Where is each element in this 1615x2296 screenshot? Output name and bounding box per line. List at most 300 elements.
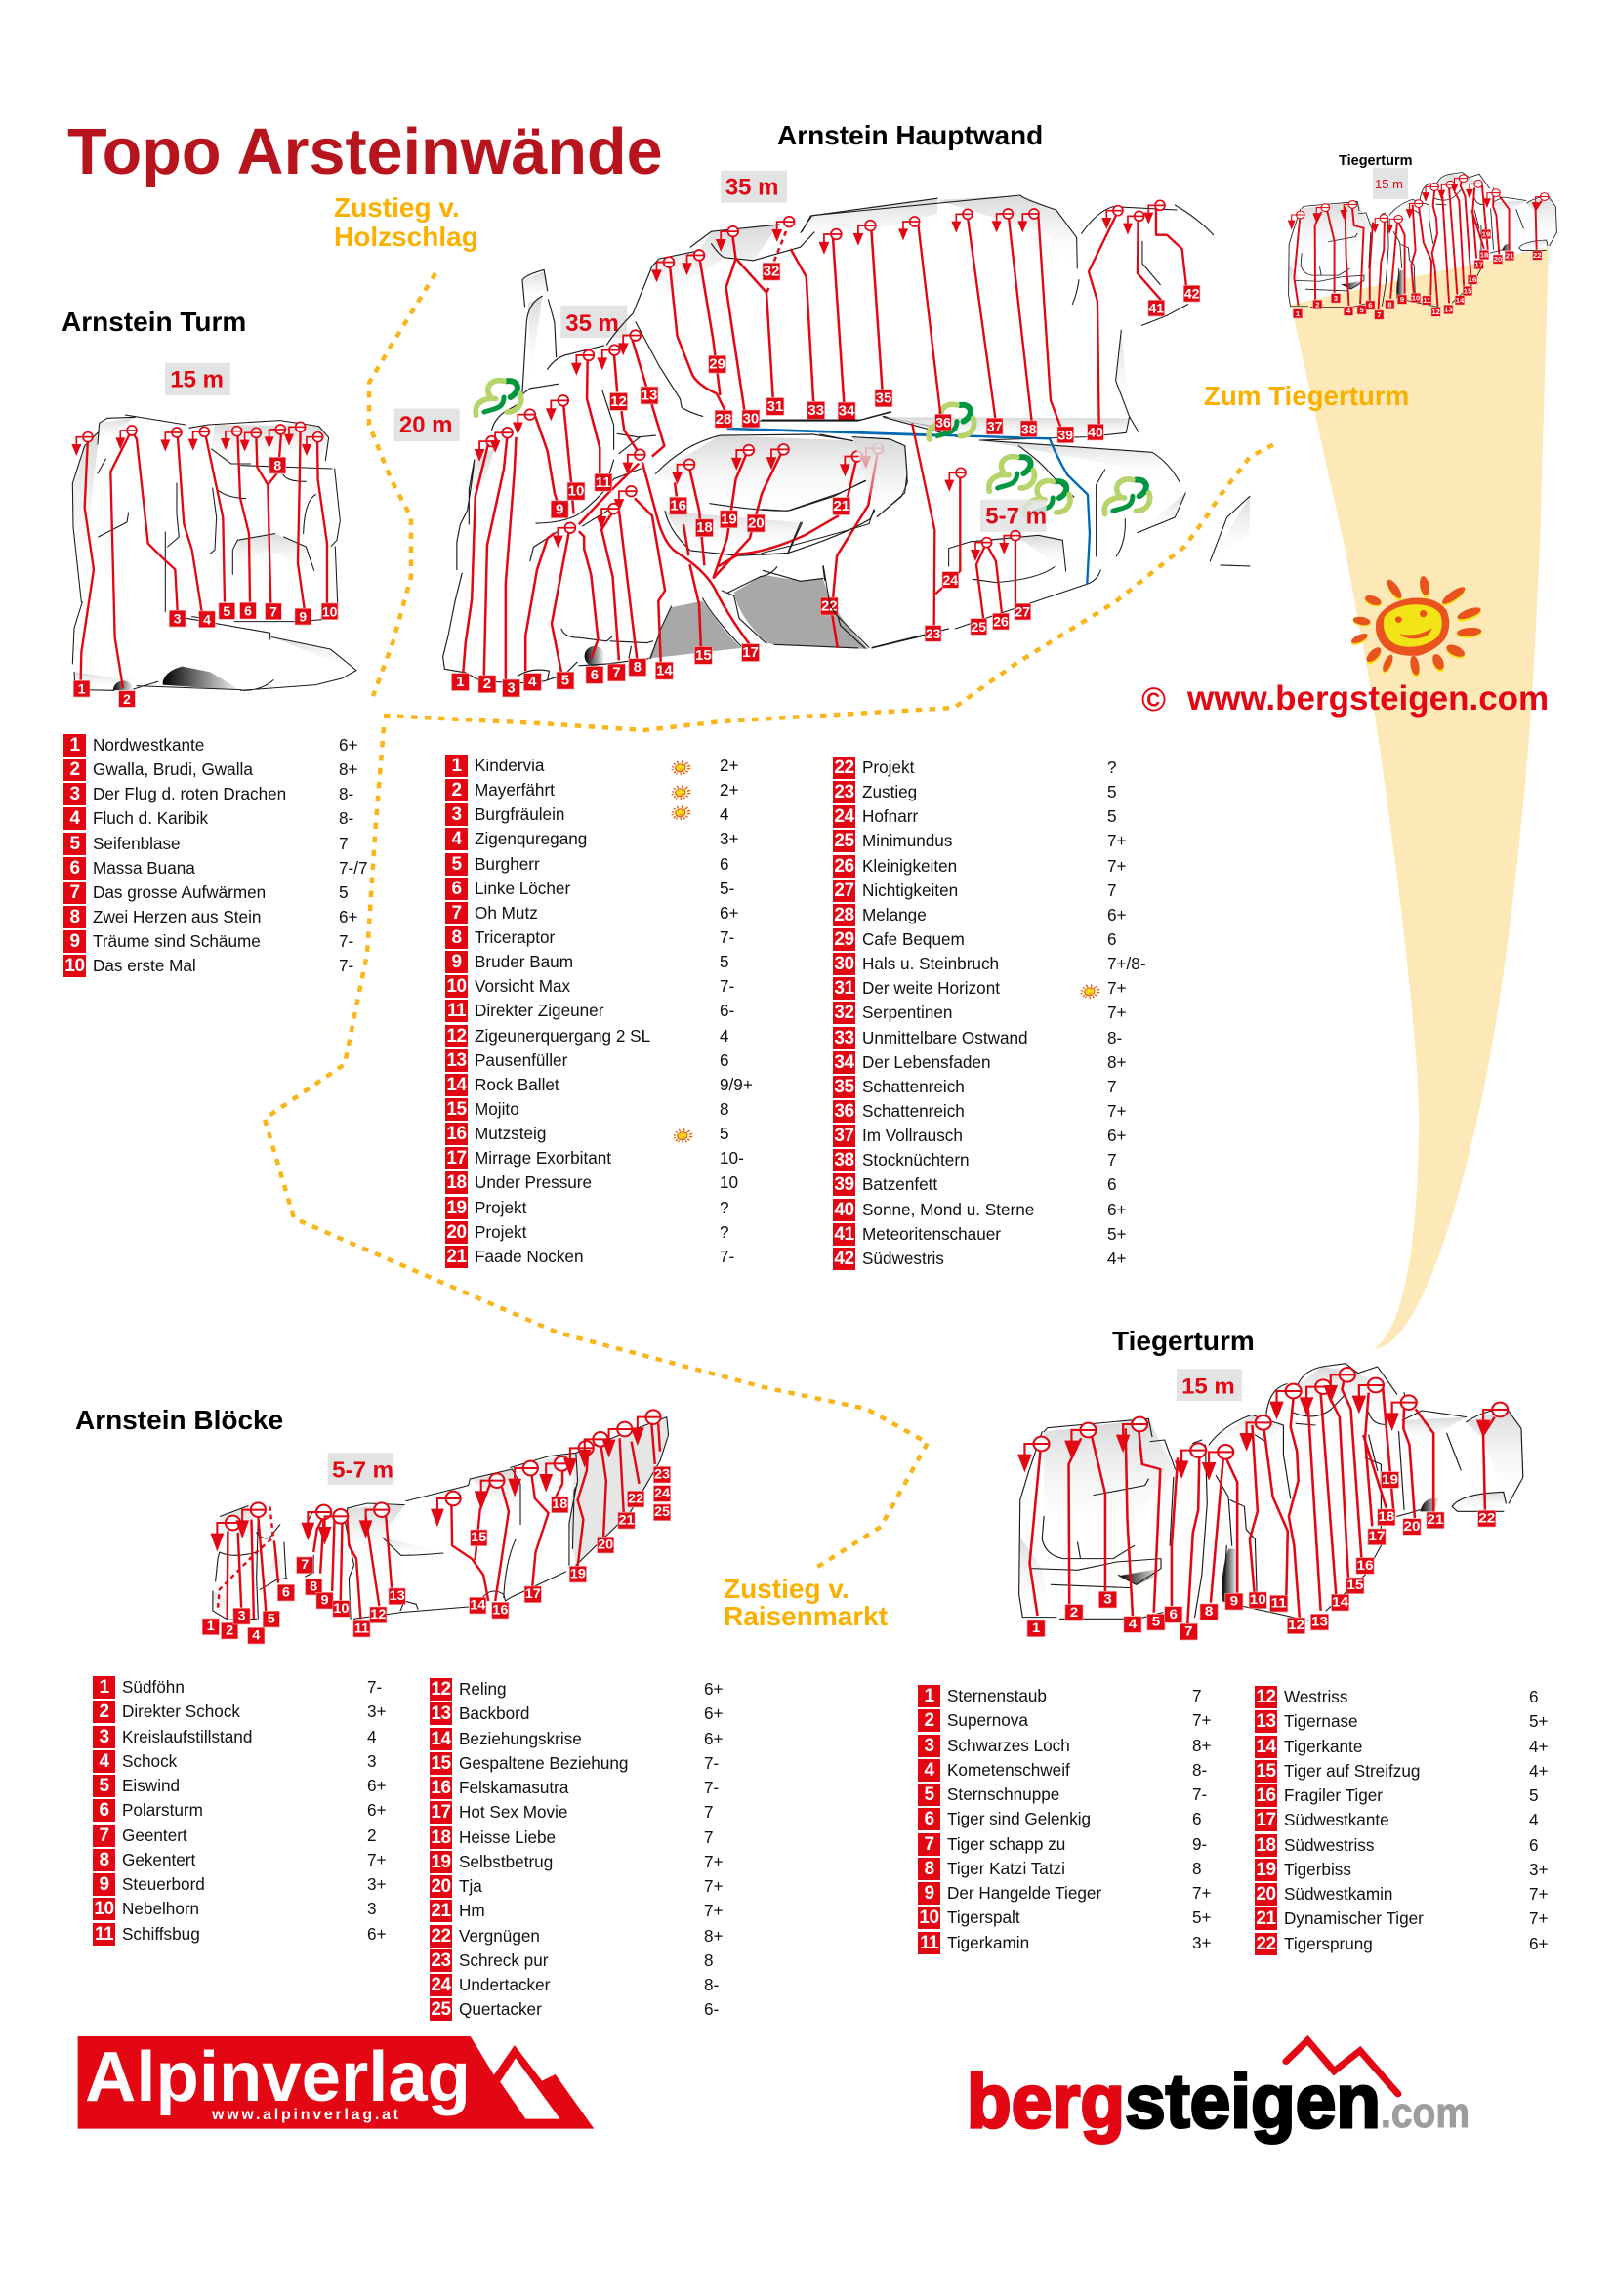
- small route number badges: 2: [1315, 300, 1319, 308]
- approach label: Zustieg v. Raisenmarkt: Raisenmarkt: [724, 1601, 888, 1631]
- text: Südwestkante: [1284, 1810, 1389, 1829]
- text: 1: [924, 1686, 934, 1706]
- small route number badges: 21: [1506, 251, 1514, 260]
- text: 6: [1107, 1174, 1117, 1194]
- text: 5: [451, 854, 462, 875]
- text: Rock Ballet: [475, 1075, 559, 1094]
- text: 16: [431, 1778, 451, 1798]
- text: Polarsturm: [122, 1800, 203, 1820]
- text: 8-: [339, 784, 353, 803]
- text: 6: [1529, 1835, 1539, 1855]
- text: Nichtigkeiten: [862, 881, 958, 900]
- text: 20: [431, 1876, 451, 1897]
- approach label: Zustieg v. Holzschlag: Holzschlag: [334, 222, 478, 252]
- small route number badges: 22: [1533, 251, 1542, 260]
- text: 2: [99, 1702, 109, 1722]
- text: Hot Sex Movie: [459, 1802, 567, 1822]
- route number badges: 24: [943, 572, 958, 588]
- text: 1: [69, 735, 80, 756]
- text: 38: [834, 1150, 854, 1170]
- route number badges: 6: [282, 1585, 290, 1601]
- text: 6-: [704, 1999, 719, 2019]
- text: 5: [1107, 806, 1117, 826]
- route number badges: 3: [174, 611, 182, 627]
- text: Undertacker: [459, 1975, 550, 1994]
- text: 7+: [1192, 1883, 1212, 1903]
- text: 33: [834, 1028, 854, 1048]
- route number badges: 31: [767, 398, 783, 415]
- text: Zigenquregang: [475, 829, 587, 848]
- text: 8: [99, 1850, 109, 1870]
- route number badges: 27: [1015, 604, 1030, 620]
- route number badges: 3: [237, 1609, 246, 1624]
- text: 4: [924, 1760, 934, 1781]
- text: 7+: [1529, 1908, 1549, 1928]
- text: 7: [924, 1833, 934, 1855]
- text: 5+: [1529, 1711, 1549, 1731]
- text: ?: [720, 1198, 729, 1217]
- approach label: Zustieg v. Raisenmarkt: Zustieg v.: [724, 1574, 849, 1604]
- text: 9-: [1192, 1833, 1207, 1853]
- small route number badges: 8: [1387, 300, 1392, 308]
- route number badges: 18: [552, 1496, 567, 1512]
- text: 6+: [704, 1703, 724, 1723]
- text: Eiswind: [122, 1776, 180, 1795]
- text: 11: [447, 1001, 466, 1021]
- text: 8+: [704, 1925, 724, 1945]
- route number badges: 11: [596, 474, 611, 491]
- text: 14: [431, 1728, 451, 1749]
- text: Vergnügen: [459, 1925, 540, 1945]
- text: Schwarzes Loch: [947, 1736, 1070, 1755]
- heading: Arnstein Hauptwand: Arnstein Hauptwand: [777, 120, 1043, 150]
- text: 7: [704, 1802, 714, 1822]
- rock shading: [213, 1417, 669, 1620]
- text: Mojito: [475, 1099, 519, 1119]
- route number badges: 22: [628, 1492, 643, 1507]
- small route number badges: 20: [1494, 255, 1502, 264]
- route number badges: [451, 263, 892, 697]
- text: 9: [99, 1874, 109, 1895]
- text: 32: [834, 1003, 854, 1023]
- text: 7: [99, 1825, 109, 1845]
- icon: trees at left of Hauptwand: [476, 381, 521, 415]
- text: 31: [834, 978, 854, 999]
- text: 5: [99, 1776, 109, 1796]
- text: 8-: [1192, 1760, 1207, 1780]
- text: Tiger schapp zu: [947, 1833, 1065, 1853]
- text: 3: [99, 1726, 109, 1747]
- text: 4: [720, 804, 729, 824]
- dotted path: to Raisenmarkt: [265, 727, 928, 1571]
- route number badges: 12: [370, 1607, 386, 1622]
- text: Projekt: [862, 758, 914, 777]
- text: 2: [69, 759, 80, 780]
- height tag: 35 m left: [560, 306, 627, 338]
- text: 23: [431, 1950, 451, 1971]
- text: 8: [924, 1859, 934, 1879]
- text: 7-: [704, 1753, 719, 1773]
- route number badges: 10: [1250, 1593, 1266, 1608]
- text: 7: [339, 834, 349, 853]
- approach label: Zum Tiegerturm: Zum Tiegerturm: [1204, 381, 1409, 411]
- anchors and abseil arrows: [210, 1410, 661, 1551]
- route number badges: 28: [716, 411, 731, 428]
- sun illustration: [1350, 575, 1482, 678]
- route number badges: 30: [743, 410, 759, 427]
- text: 24: [431, 1975, 451, 1995]
- text: 3+: [367, 1874, 387, 1894]
- text: 10: [94, 1899, 114, 1919]
- text: 7: [1192, 1686, 1202, 1705]
- height tag: 15 m: [1177, 1369, 1242, 1401]
- rock shading: [852, 195, 1250, 571]
- text: 28: [834, 905, 854, 925]
- small route number badges: 18: [1480, 250, 1489, 259]
- route list: Tiegerturm routes 1 to 11: [918, 1685, 1212, 1954]
- text: 7+: [1107, 856, 1127, 876]
- text: 5: [924, 1784, 934, 1805]
- text: Sternschnuppe: [947, 1784, 1059, 1804]
- route number badges: 13: [642, 387, 657, 403]
- logo: bergsteigen.com: bergsteigen: [967, 2058, 1381, 2144]
- text: 26: [834, 856, 854, 877]
- route number badges: 1: [78, 681, 86, 697]
- route list: Hauptwand routes 1 to 21: [445, 755, 753, 1268]
- text: 6+: [367, 1923, 387, 1943]
- text: Massa Buana: [93, 858, 195, 878]
- heading: Tiegerturm: Tiegerturm: [1112, 1326, 1255, 1356]
- text: Gespaltene Beziehung: [459, 1753, 628, 1773]
- text: 15: [1256, 1761, 1276, 1782]
- text: 4: [1529, 1810, 1539, 1829]
- text: Mutzsteig: [475, 1124, 546, 1143]
- small route number badges: 15: [1464, 286, 1472, 295]
- text: Supernova: [947, 1710, 1028, 1730]
- route number badges: 19: [1382, 1472, 1398, 1488]
- rock outline: [443, 198, 937, 683]
- route number badges: 15: [471, 1530, 486, 1545]
- text: 19: [431, 1852, 451, 1872]
- text: 12: [1256, 1687, 1276, 1707]
- route number badges: 22: [821, 598, 838, 615]
- route number badges: 15: [695, 647, 712, 664]
- text: Schattenreich: [862, 1101, 965, 1121]
- anchors and abseil arrows: [898, 200, 1165, 561]
- route number badges: 6: [1170, 1607, 1178, 1622]
- text: Hals u. Steinbruch: [862, 954, 999, 973]
- route number badges: 36: [935, 415, 951, 430]
- text: 8+: [1192, 1736, 1212, 1755]
- height tag: 15 m: [165, 363, 230, 395]
- route number badges: 33: [808, 402, 824, 419]
- text: 6+: [339, 907, 358, 926]
- text: 4+: [1529, 1761, 1549, 1781]
- text: 6+: [1107, 905, 1127, 924]
- anchors and abseil arrows: [475, 217, 884, 548]
- text: Mirrage Exorbitant: [475, 1148, 611, 1168]
- text: 17: [431, 1802, 451, 1823]
- route number badges: 14: [656, 663, 673, 679]
- route number badges: 10: [568, 483, 584, 500]
- text: Tja: [459, 1876, 482, 1896]
- small route number badges: 19: [1482, 229, 1490, 238]
- text: Bruder Baum: [475, 952, 573, 971]
- text: 3+: [1529, 1860, 1549, 1879]
- anchors and abseil arrows: [1017, 1368, 1508, 1481]
- route number badges: [1027, 1472, 1496, 1640]
- text: Burgfräulein: [475, 804, 564, 824]
- climbing routes: [81, 427, 327, 688]
- text: 22: [834, 758, 854, 778]
- route number badges: 22: [1478, 1511, 1495, 1526]
- route number badges: 17: [1369, 1530, 1386, 1544]
- text: 14: [446, 1075, 467, 1095]
- height tag: 15 m: 15 m: [1181, 1374, 1235, 1398]
- text: Sonne, Mond u. Sterne: [862, 1200, 1034, 1219]
- route number badges: [202, 1466, 671, 1644]
- text: 5: [1107, 782, 1117, 801]
- text: 7+: [704, 1852, 724, 1871]
- text: Dynamischer Tiger: [1284, 1908, 1424, 1928]
- text: ?: [1107, 758, 1117, 777]
- text: 4+: [1107, 1249, 1127, 1268]
- text: 9: [451, 952, 462, 972]
- icons: small suns marking family routes: [671, 760, 1100, 1144]
- text: Tiger sind Gelenkig: [947, 1809, 1091, 1828]
- text: 30: [834, 954, 854, 974]
- text: Vorsicht Max: [475, 976, 570, 996]
- text: 8+: [339, 759, 358, 779]
- height tag: 35 m upper: [721, 171, 787, 202]
- route number badges: 2: [483, 676, 491, 692]
- route number badges: 42: [1184, 286, 1200, 302]
- text: Träume sind Schäume: [93, 931, 261, 951]
- route number badges: 38: [1021, 421, 1037, 436]
- text: 42: [834, 1249, 854, 1269]
- text: Zwei Herzen aus Stein: [93, 907, 261, 926]
- route number badges: 7: [301, 1557, 309, 1573]
- text: 4+: [1529, 1736, 1549, 1755]
- text: 13: [1256, 1711, 1276, 1732]
- dotted path: Holzschlag approach: [369, 273, 435, 696]
- heading: small Tiegerturm: Tiegerturm: [1339, 153, 1412, 169]
- text: 4: [69, 808, 80, 829]
- route number badges: 21: [618, 1513, 635, 1529]
- route number badges: 1: [456, 674, 465, 690]
- route number badges: 19: [721, 511, 737, 527]
- text: Kleinigkeiten: [862, 856, 957, 876]
- panel: Arnstein Hauptwand topo, right part: [762, 195, 1250, 647]
- text: Der Lebensfaden: [862, 1052, 991, 1072]
- text: Tigernase: [1284, 1711, 1358, 1731]
- text: 10: [446, 976, 467, 997]
- dotted path: to Tiegerturm: [384, 444, 1274, 730]
- text: Selbstbetrug: [459, 1852, 553, 1871]
- text: 6: [720, 1050, 729, 1070]
- route number badges: 23: [926, 626, 941, 641]
- text: 39: [834, 1174, 854, 1195]
- text: 40: [834, 1200, 854, 1220]
- climbing routes: [463, 225, 883, 681]
- text: Projekt: [475, 1198, 526, 1217]
- text: Schreck pur: [459, 1950, 548, 1970]
- route list: Blöcke routes 12 to 25: [430, 1678, 724, 2021]
- text: 7-: [367, 1677, 382, 1697]
- text: 7+: [704, 1876, 724, 1896]
- rock shading: [469, 198, 937, 666]
- text: 2+: [720, 780, 739, 800]
- text: Projekt: [475, 1222, 526, 1242]
- text: 7: [704, 1827, 714, 1847]
- small route number badges: 11: [1423, 296, 1431, 305]
- text: 5+: [1107, 1224, 1127, 1244]
- text: Minimundus: [862, 831, 952, 850]
- text: 6+: [704, 1679, 724, 1699]
- text: 3: [69, 784, 80, 804]
- text: 4: [451, 829, 462, 849]
- text: 3+: [1192, 1933, 1212, 1952]
- route number badges: 39: [1058, 427, 1073, 442]
- text: 2: [367, 1825, 377, 1845]
- text: 13: [431, 1703, 451, 1724]
- panel: small Tiegerturm overview: [1288, 153, 1556, 319]
- text: 4: [720, 1026, 729, 1046]
- text: 10: [919, 1907, 939, 1928]
- text: 7: [1107, 1150, 1117, 1169]
- route number badges: 21: [833, 498, 849, 514]
- text: Heisse Liebe: [459, 1827, 556, 1847]
- text: Sternenstaub: [947, 1686, 1047, 1705]
- text: Kometenschweif: [947, 1760, 1070, 1780]
- text: Oh Mutz: [475, 903, 538, 922]
- small route number badges: 4: [1346, 307, 1351, 315]
- text: Der weite Horizont: [862, 978, 1000, 998]
- text: 6+: [720, 903, 739, 922]
- text: 14: [1256, 1736, 1276, 1757]
- text: 21: [431, 1901, 451, 1921]
- route number badges: 4: [528, 674, 537, 690]
- text: 16: [1256, 1785, 1276, 1806]
- text: 41: [834, 1224, 854, 1245]
- climbing routes: [1030, 1381, 1495, 1623]
- text: Nordwestkante: [93, 735, 204, 755]
- text: Backbord: [459, 1703, 529, 1723]
- height tag: 5-7 m: 5-7 m: [985, 504, 1047, 530]
- text: 2: [924, 1710, 934, 1731]
- route number badges: 24: [654, 1486, 670, 1501]
- route number badges: 10: [322, 603, 338, 619]
- route number badges: 6: [591, 667, 599, 683]
- text: Tigerbiss: [1284, 1860, 1351, 1879]
- text: 7: [1107, 881, 1117, 900]
- text: 7+: [1107, 1101, 1127, 1121]
- route number badges: 4: [252, 1628, 260, 1644]
- route number badges: 5: [1152, 1615, 1160, 1629]
- height tag: 20 m: 20 m: [399, 412, 452, 438]
- text: 7-: [720, 1247, 734, 1266]
- text: 2: [451, 780, 462, 800]
- panel: Arnstein Hauptwand topo, left part: [394, 171, 937, 697]
- text: 8: [69, 907, 80, 927]
- text: Kreislaufstillstand: [122, 1726, 252, 1745]
- text: 4: [367, 1726, 377, 1745]
- text: 18: [446, 1172, 467, 1193]
- rock outline, lower block: [650, 412, 937, 659]
- route list: Arnstein Turm: [63, 734, 368, 977]
- text: 3+: [720, 829, 739, 848]
- text: 6+: [1107, 1200, 1127, 1219]
- small route number badges: 7: [1377, 310, 1381, 319]
- text: 36: [834, 1101, 854, 1122]
- text: Hofnarr: [862, 806, 918, 826]
- text: Stocknüchtern: [862, 1150, 970, 1169]
- text: Direkter Schock: [122, 1702, 240, 1721]
- route number badges: 7: [269, 603, 277, 619]
- text: Felskamasutra: [459, 1778, 568, 1797]
- route number badges: 11: [354, 1621, 369, 1637]
- text: 8: [704, 1950, 714, 1970]
- text: 4: [99, 1751, 109, 1772]
- route number badges: 32: [764, 264, 779, 280]
- small route number badges: 17: [1474, 260, 1483, 268]
- text: 11: [920, 1933, 938, 1952]
- route list: Hauptwand routes 22 to 42: [833, 757, 1146, 1270]
- route number badges: 3: [507, 679, 516, 696]
- text: 7+: [367, 1850, 387, 1869]
- route number badges: 20: [1404, 1519, 1421, 1535]
- text: Tigersprung: [1284, 1933, 1373, 1952]
- text: Quertacker: [459, 1999, 542, 2019]
- route number badges: 20: [748, 515, 765, 532]
- small route number badges: [1293, 229, 1542, 319]
- route number badges: 16: [492, 1603, 508, 1619]
- small route number badges: 9: [1400, 295, 1404, 304]
- text: Fragiler Tiger: [1284, 1785, 1383, 1805]
- text: 6+: [339, 735, 358, 755]
- text: 6: [720, 854, 729, 874]
- text: Südföhn: [122, 1677, 185, 1697]
- route number badges: 8: [1205, 1605, 1213, 1620]
- route number badges: 9: [1230, 1594, 1238, 1609]
- text: 7: [1107, 1077, 1117, 1096]
- text: Hm: [459, 1901, 485, 1920]
- anchors and abseil arrows: [71, 422, 323, 456]
- text: 16: [446, 1124, 467, 1144]
- route number badges: 10: [333, 1601, 350, 1617]
- logo: Alpinverlag: Alpinverlag: [85, 2037, 471, 2116]
- approach label: Zustieg v. Holzschlag: Zustieg v.: [334, 192, 460, 223]
- text: 9: [69, 931, 80, 952]
- text: Mayerfährt: [475, 780, 555, 800]
- text: 1: [99, 1677, 109, 1698]
- text: ?: [720, 1222, 729, 1242]
- rock outline: [762, 195, 1250, 647]
- text: Beziehungskrise: [459, 1728, 582, 1747]
- text: Steuerbord: [122, 1874, 205, 1894]
- text: 24: [834, 806, 854, 827]
- route number badges: [925, 285, 1200, 641]
- text: Batzenfett: [862, 1174, 937, 1194]
- route number badges: 3: [1103, 1592, 1112, 1607]
- text: Tiger Katzi Tatzi: [947, 1859, 1065, 1878]
- text: 6: [69, 858, 80, 879]
- text: 5: [1529, 1785, 1539, 1805]
- text: Geentert: [122, 1825, 187, 1845]
- route number badges: 12: [1288, 1619, 1304, 1633]
- rock shading: [1019, 1367, 1523, 1618]
- text: 5: [339, 882, 349, 902]
